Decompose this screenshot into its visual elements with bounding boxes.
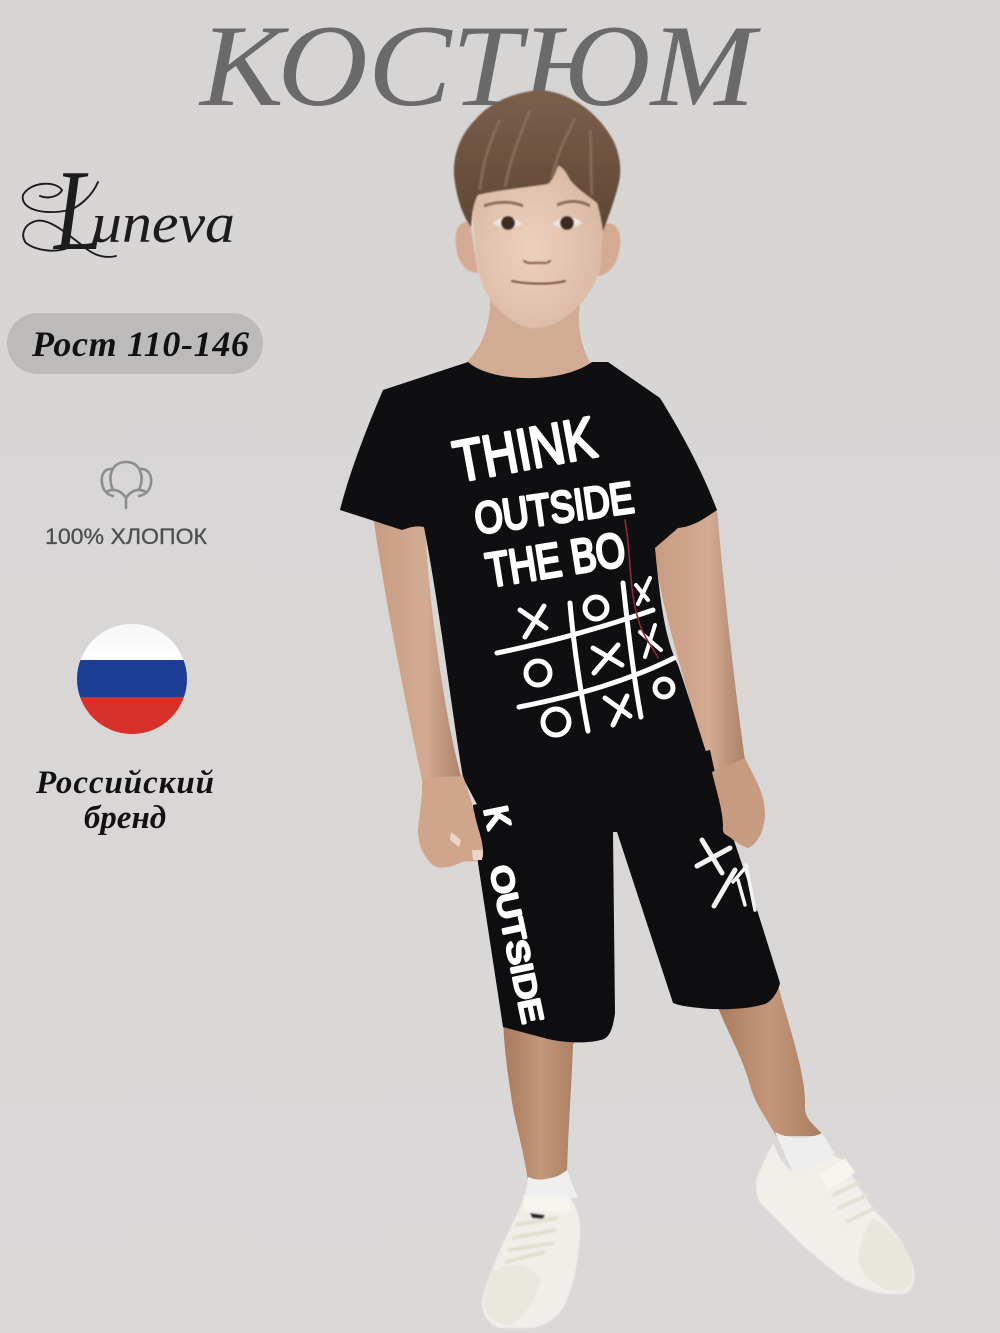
- logo: Luneva: uneva: [92, 193, 235, 255]
- left arm: [373, 515, 462, 780]
- brows: [484, 201, 590, 206]
- shorts print: outside: [477, 803, 549, 1026]
- face: [472, 150, 603, 328]
- t-shirt: [340, 362, 717, 810]
- hair: [454, 90, 620, 232]
- head: [454, 90, 620, 328]
- shorts print: crosses: [697, 840, 755, 910]
- shirt print: slogan: [449, 405, 637, 598]
- right leg: [715, 985, 824, 1136]
- shirt print: tic-tac-toe grid: [497, 520, 674, 735]
- left shoe: [482, 1195, 580, 1328]
- logo: Luneva: [23, 147, 235, 275]
- mouth: [512, 281, 565, 284]
- left leg: [503, 1020, 580, 1182]
- ears: [456, 222, 478, 273]
- height badge: [7, 313, 263, 374]
- hair strands: [480, 110, 592, 195]
- boy figure: [340, 90, 915, 1328]
- icon: cotton: [102, 462, 151, 508]
- brand caption: [35, 765, 214, 836]
- shorts: [473, 750, 780, 1042]
- cotton label: 100% ХЛОПОК: [45, 524, 207, 549]
- shirt print: slogan: THINK: [449, 405, 601, 495]
- height badge: Рост 110-146: [31, 324, 249, 364]
- right hand: [712, 758, 765, 848]
- left hand: [418, 776, 483, 868]
- shirt print: slogan: OUTSIDE: [472, 473, 637, 544]
- shorts print: outside: OUTSIDE: [483, 863, 549, 1026]
- right sock: [775, 1132, 835, 1173]
- nose: [524, 261, 550, 263]
- left sock: [525, 1170, 578, 1198]
- right arm: [655, 510, 745, 775]
- left hand fingers detail: [450, 832, 483, 860]
- neck: [467, 290, 592, 385]
- brand caption: Российский: [35, 765, 214, 801]
- shorts print: outside: K: [477, 803, 518, 832]
- shirt print: slogan: THE BO: [482, 524, 629, 598]
- brand caption: бренд: [84, 800, 166, 836]
- title: КОСТЮМ: [198, 2, 761, 131]
- right shoe: [756, 1143, 915, 1294]
- icon: russian flag: [77, 624, 187, 735]
- logo: Luneva: L: [52, 147, 104, 275]
- eyes: [493, 217, 582, 228]
